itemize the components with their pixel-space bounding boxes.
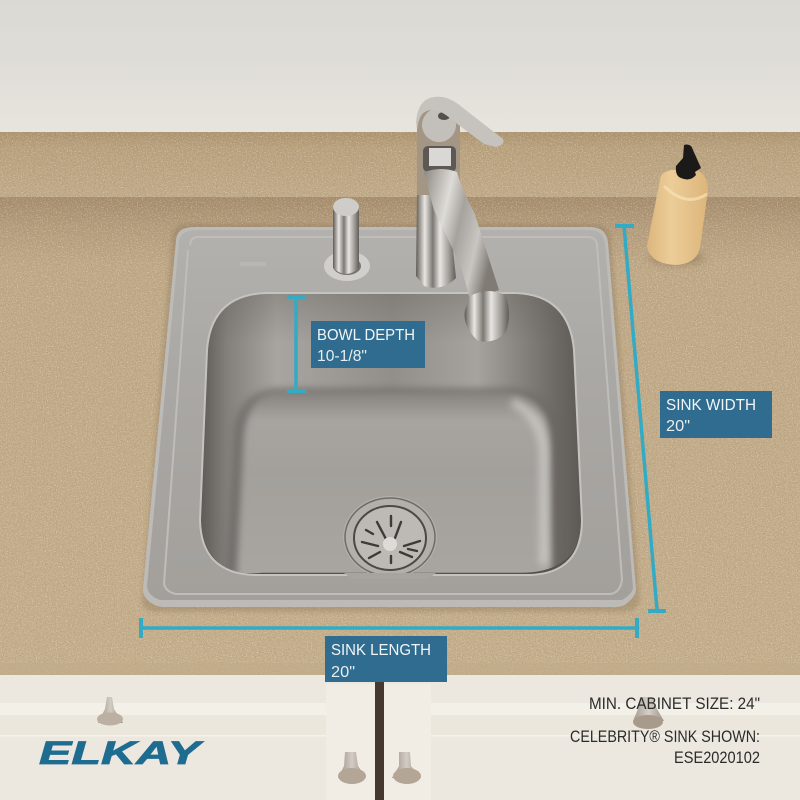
label: bowl depth: BOWL DEPTH [317, 327, 415, 344]
soap dispenser on deck [324, 198, 370, 281]
faucet [416, 97, 509, 342]
label: sink length: SINK LENGTH [331, 642, 431, 659]
label: sink width: SINK WIDTH [666, 397, 756, 414]
label: sink width [660, 391, 772, 438]
faucet base [416, 192, 456, 288]
cabinet knob left [97, 697, 123, 726]
label: sink length: 20" [331, 664, 355, 681]
bowl floor [226, 388, 558, 580]
text: cabinet size: MIN. CABINET SIZE: 24" [589, 695, 760, 713]
countertop and backsplash [0, 132, 800, 677]
bottle pump [676, 145, 701, 179]
text: sink model [570, 728, 760, 767]
logo on deck [240, 262, 266, 266]
sink deck [143, 227, 636, 607]
cabinet knob right [633, 697, 664, 729]
cabinet doors [0, 675, 800, 800]
label: sink length [325, 636, 447, 682]
sink bowl [199, 292, 583, 576]
cabinet knob lower right [392, 752, 421, 784]
deck inner line [164, 237, 622, 594]
dimension: bowl depth [287, 297, 306, 391]
wall background [0, 0, 800, 133]
label: bowl depth: 10-1/8" [317, 348, 367, 365]
faucet column [417, 108, 460, 195]
text: sink model: CELEBRITY® SINK SHOWN: [570, 728, 760, 746]
cabinet knob lower left [338, 752, 366, 784]
faucet spray head [465, 291, 509, 342]
label: bowl depth [311, 321, 425, 368]
dimension: sink length [141, 618, 637, 638]
sink shadow [142, 224, 640, 612]
dimension: sink width [615, 226, 666, 611]
text: sink model: ESE2020102 [674, 749, 760, 767]
sink [142, 224, 640, 612]
logo: Elkay: ELKAY [39, 735, 204, 771]
soap bottle [647, 145, 708, 265]
drain [343, 496, 437, 579]
faucet spout [424, 169, 499, 300]
label: sink width: 20" [666, 418, 690, 435]
faucet handle [416, 97, 503, 147]
